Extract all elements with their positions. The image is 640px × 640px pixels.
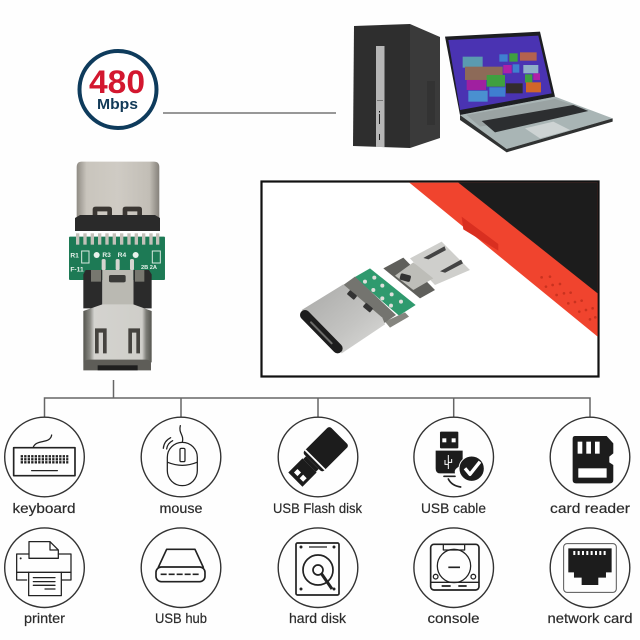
device: network card [548,528,632,626]
adapter angled view [302,242,470,353]
green circuit board: R1 [70,253,79,260]
speed badge: 480 Mbps [80,51,156,128]
connector tree line from adapter to devices [44,380,590,417]
green circuit board: 2B 2A [141,265,157,271]
green circuit board: R4 [118,252,126,259]
green circuit board: F-11 [70,267,84,274]
red phone body [409,183,598,337]
desktop tower computer [353,24,440,148]
device: keyboard [5,417,84,516]
label: hard disk: hard disk [289,610,347,626]
label: USB hub: USB hub [155,610,207,626]
speed badge: 480 Mbps: 480 [89,64,145,100]
icon: network port [564,544,616,592]
icon: mouse [163,426,197,486]
device: mouse [141,417,221,516]
label: USB Flash disk: USB Flash disk [273,500,363,516]
icon: USB flash drive [285,426,349,490]
connector line from badge to computers [163,112,336,114]
device: card reader [550,417,630,516]
device: hard disk [278,528,358,626]
USB-C metal shell [77,162,159,218]
icon: keyboard [14,435,75,476]
label: printer: printer [24,610,65,626]
green circuit board [69,237,165,280]
panel: adapter plugged toward red phone [262,182,598,376]
label: USB cable: USB cable [421,500,486,516]
device: printer [5,528,84,626]
device: USB flash disk [273,417,363,516]
device: USB cable [414,417,494,516]
label: card reader: card reader [550,500,630,516]
device: USB hub [141,528,221,626]
solder pins [76,233,159,245]
adapter: front view, USB-C to Micro USB [69,162,165,370]
black micro USB housing [83,270,152,308]
icon: USB plug with check mark [436,432,484,487]
green circuit board: R3 [102,252,111,259]
laptop computer [445,32,613,152]
label: keyboard: keyboard [12,500,76,516]
icon: memory card [573,436,613,483]
device: console [414,528,494,626]
black collar [75,215,160,231]
icon: console [431,544,479,590]
icon: printer [17,542,71,596]
icon: hard disk [296,543,339,595]
label: console: console [428,610,480,626]
icon: USB hub [156,549,205,582]
label: network card: network card [548,610,632,626]
micro USB metal plug [83,304,152,370]
speed badge: 480 Mbps: Mbps [97,96,138,113]
label: mouse: mouse [160,500,203,516]
